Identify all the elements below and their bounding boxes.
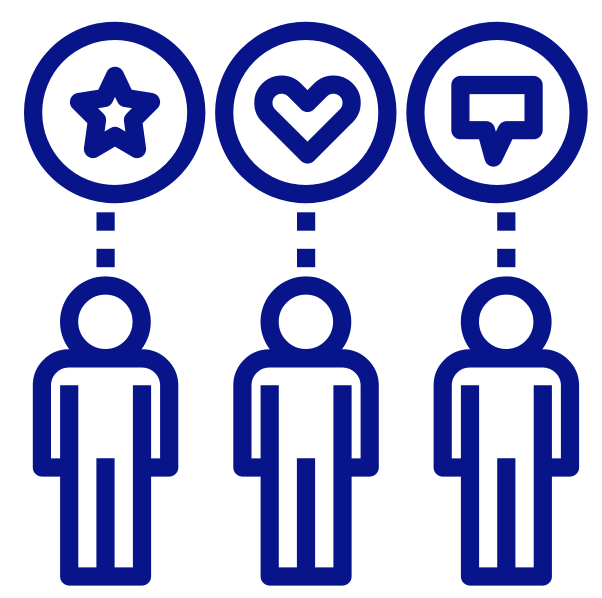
person two bbox=[242, 286, 370, 576]
icon: speech bubble in circle bbox=[415, 31, 579, 194]
person one bbox=[42, 286, 169, 576]
person three bbox=[443, 286, 570, 576]
icon: star in circle bbox=[33, 31, 196, 194]
icon: heart in circle bbox=[224, 31, 387, 194]
connector: dashed line two bbox=[297, 212, 315, 267]
connector: dashed line one bbox=[96, 212, 115, 267]
connector: dashed line three bbox=[497, 212, 515, 267]
